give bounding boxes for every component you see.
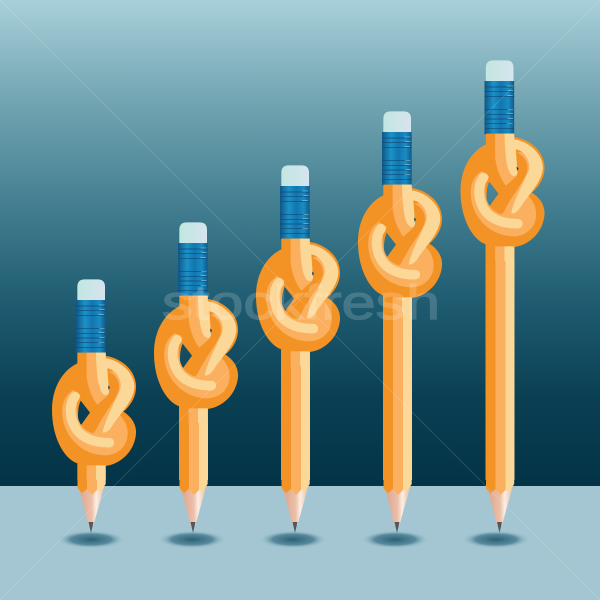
- shadow: pencil 1: [57, 530, 125, 548]
- floor: [0, 486, 600, 600]
- shadow: pencil 3: [259, 530, 327, 548]
- shadow: pencil 2: [158, 530, 226, 548]
- pencil 2: [154, 222, 238, 533]
- pencil 1 (shortest): [52, 279, 136, 533]
- watermark text: stockfresh: [162, 277, 440, 330]
- pencil 5 (tallest): [460, 60, 545, 533]
- pencil 4: [358, 111, 442, 533]
- shadow: pencil 4: [361, 530, 429, 548]
- shadow: pencil 5: [462, 530, 530, 548]
- pencil 3: [256, 165, 340, 533]
